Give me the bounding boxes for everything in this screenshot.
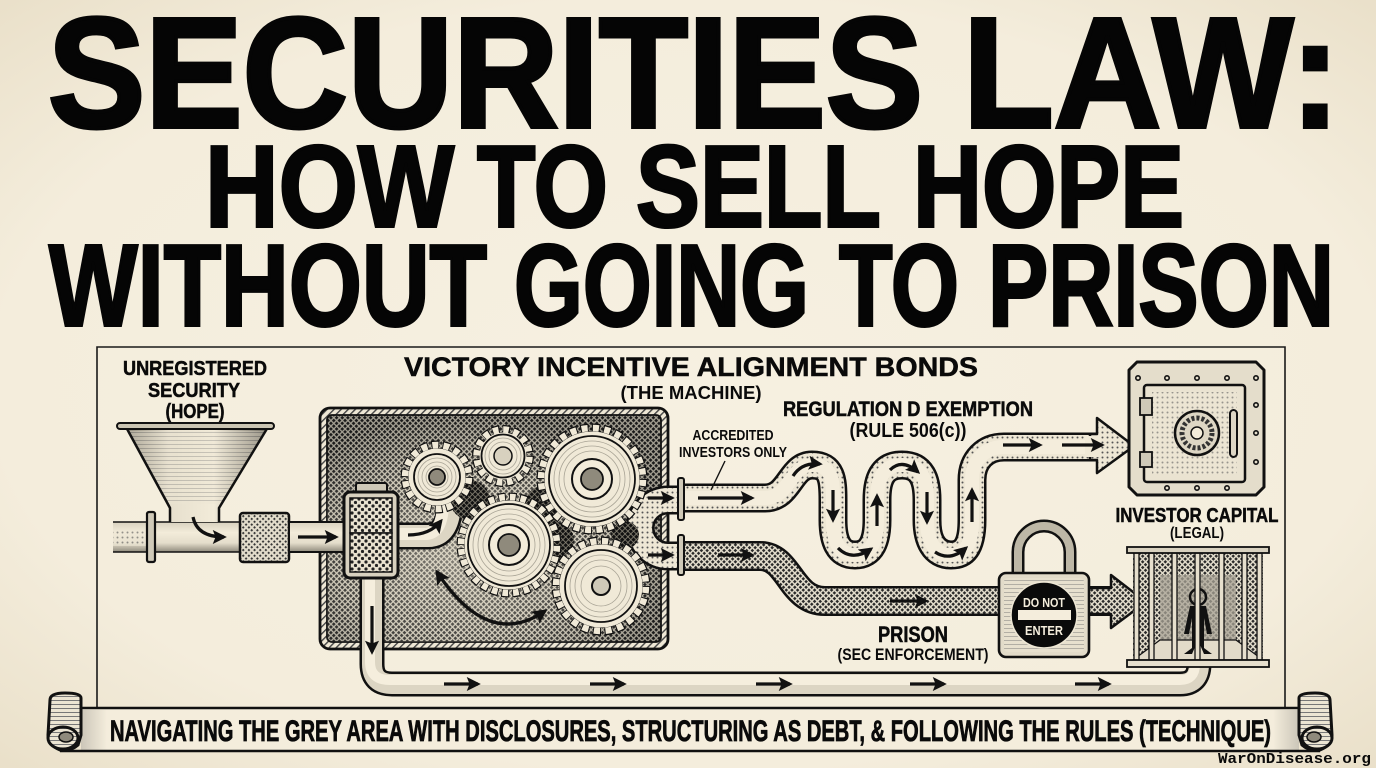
label: prison [838,622,988,664]
pipe to filter [289,522,345,552]
machine heading: VICTORY INCENTIVE ALIGNMENT BONDS [404,352,978,382]
gear top small [476,429,530,483]
gear left [404,444,470,510]
label: investor capital [1116,504,1278,542]
arrow: into filter [298,535,336,539]
pipe: regulation D serpentine [684,418,1134,556]
label: prison: (SEC ENFORCEMENT) [838,645,988,664]
label: unregistered security: SECURITY [148,380,241,402]
machine heading: (THE MACHINE) [620,383,762,403]
watermark: WarOnDisease.org [1218,752,1371,768]
label: regulation D exemption: REGULATION D EXEMPTION [783,398,1033,421]
icon: padlock with do not enter sign [999,526,1089,657]
icon: funnel and inlet pipe [113,423,289,562]
pipe: bypass underneath to prison [370,575,1199,684]
title [48,0,1340,350]
pipe: filter to gears [398,503,450,536]
pipe: prison path [684,555,1146,628]
outlet manifold [640,500,682,556]
label: accredited investors only: ACCREDITED [692,428,774,444]
title line 3 [49,220,1334,350]
label: regulation D exemption: (RULE 506(c)) [850,420,966,442]
machine heading [404,352,978,403]
scroll end left [48,693,81,750]
gear bottom right [556,540,646,632]
scroll end right [1299,693,1332,750]
label: accredited investors only: INVESTORS ONLY [679,444,787,461]
label: unregistered security [123,358,267,423]
label: unregistered security: UNREGISTERED [123,358,267,380]
icon: padlock with do not enter sign: ENTER [1025,623,1064,638]
label: prison: PRISON [878,622,948,647]
label: accredited investors only [679,428,787,490]
gear large top right [540,428,644,530]
title line 3: WITHOUT [49,220,487,350]
icon: safe [1129,362,1264,495]
label: unregistered security: (HOPE) [166,401,224,423]
panel: the machine [320,408,668,649]
title line 3: TO [839,220,959,350]
gear large centre [460,496,558,594]
label: investor capital: (LEGAL) [1170,525,1224,542]
pipe flanges [648,478,684,575]
dark mesh shading around gears [450,480,639,558]
title line 2: TO [477,122,608,252]
title line 2: HOPE [913,122,1184,252]
title line 2 [205,122,1184,252]
arrow: gear rotation [437,572,545,624]
icon: filter valve [344,483,398,578]
icon: padlock with do not enter sign: DO NOT [1023,595,1065,610]
title line 3: GOING [514,220,809,350]
title line 2: SELL [636,122,881,252]
banner scroll [48,693,1332,751]
icon: gear cluster [404,428,646,632]
icon: prison cage with figure [1127,547,1269,667]
title line 2: HOW [205,122,454,252]
label: investor capital: INVESTOR CAPITAL [1116,504,1278,527]
diagram frame [97,347,1285,712]
label: regulation D exemption [783,398,1033,442]
